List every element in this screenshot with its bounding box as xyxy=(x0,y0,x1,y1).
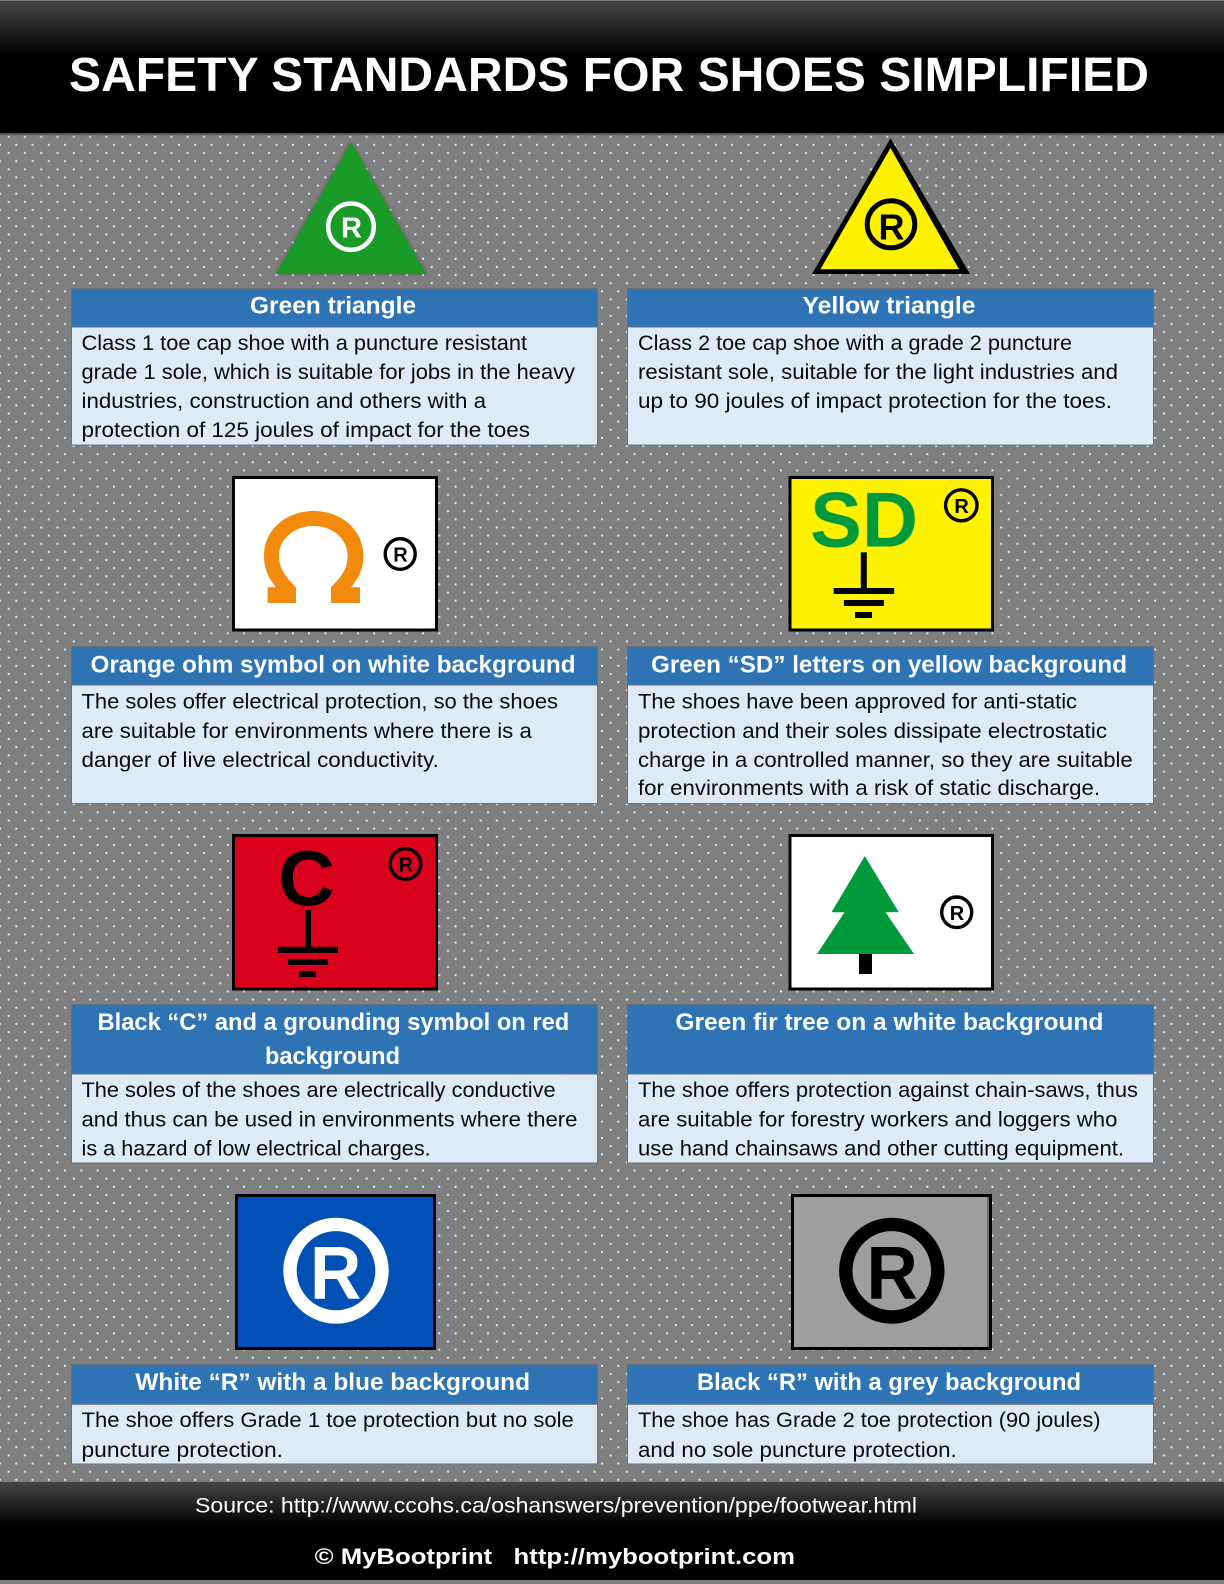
table: green SD xyxy=(628,646,1154,804)
body text: protection of 125 joules of impact for the toes xyxy=(82,418,530,442)
body text: industries, construction and others with a xyxy=(82,389,486,413)
heading: White “R” with a blue background xyxy=(135,1369,530,1396)
heading: Green fir tree on a white background xyxy=(675,1009,1103,1036)
body text: danger of live electrical conductivity. xyxy=(82,748,439,772)
icon: black C with ground on red: R xyxy=(399,855,414,877)
table: white R on blue xyxy=(72,1364,598,1464)
body text: up to 90 joules of impact protection for the toes. xyxy=(638,389,1112,413)
body text xyxy=(82,1078,577,1161)
icon: orange ohm symbol on white: R xyxy=(393,545,408,567)
panel: black C xyxy=(72,834,598,1163)
body text: Class 1 toe cap shoe with a puncture resistant xyxy=(82,331,527,355)
icon: orange ohm symbol on white xyxy=(234,478,436,630)
icon: black R on grey: R xyxy=(866,1230,918,1314)
body text: is a hazard of low electrical charges. xyxy=(82,1137,431,1161)
body text: and no sole puncture protection. xyxy=(638,1438,957,1462)
body text xyxy=(82,689,558,772)
icon: black R on grey xyxy=(792,1196,990,1348)
icon: yellow triangle with R: R xyxy=(878,206,904,247)
icon: yellow triangle with R xyxy=(812,138,970,274)
icon: white R on blue xyxy=(236,1196,434,1348)
heading: background xyxy=(265,1043,400,1070)
panel: green SD xyxy=(628,476,1154,804)
body text: are suitable for forestry workers and loggers who xyxy=(638,1107,1117,1131)
heading xyxy=(98,1009,569,1070)
body text xyxy=(638,1078,1138,1161)
source line: Source: http://www.ccohs.ca/oshanswers/prevention/ppe/footwear.html xyxy=(195,1495,917,1518)
body text: The shoes have been approved for anti-static xyxy=(638,689,1077,713)
body text xyxy=(638,331,1118,413)
heading: Yellow triangle xyxy=(802,292,976,319)
body text: The shoe has Grade 2 toe protection (90 joules) xyxy=(638,1408,1100,1432)
table: green fir tree xyxy=(628,1004,1154,1163)
body text: protection and their soles dissipate electrostatic xyxy=(638,719,1107,743)
heading: Green triangle xyxy=(250,292,416,319)
table: black C xyxy=(72,1004,598,1163)
heading: Green “SD” letters on yellow background xyxy=(651,651,1127,678)
table: yellow triangle xyxy=(628,288,1154,445)
heading: Orange ohm symbol on white background xyxy=(90,651,576,678)
footer band xyxy=(0,1482,1224,1580)
panel: green triangle xyxy=(72,142,598,445)
body text xyxy=(82,331,575,442)
body text: for environments with a risk of static discharge. xyxy=(638,776,1100,800)
icon: green triangle with R: R xyxy=(341,212,362,244)
body text: Class 2 toe cap shoe with a grade 2 puncture xyxy=(638,331,1072,355)
body text: are suitable for environments where there is a xyxy=(82,719,532,743)
body text xyxy=(82,1408,574,1462)
body text: grade 1 sole, which is suitable for jobs in the heavy xyxy=(82,360,575,384)
body text: The soles offer electrical protection, so the shoes xyxy=(82,689,558,713)
heading: Black “C” and a grounding symbol on red xyxy=(98,1009,569,1036)
header band xyxy=(0,0,1224,137)
panel: black R on grey xyxy=(628,1196,1154,1464)
table: orange ohm xyxy=(72,646,598,804)
body text xyxy=(638,1408,1100,1462)
body text: The soles of the shoes are electrically conductive xyxy=(82,1078,556,1102)
icon: green fir tree on white xyxy=(790,836,992,989)
icon: green SD with ground on yellow: R xyxy=(954,496,969,518)
panel: orange ohm xyxy=(72,478,598,804)
body text: and thus can be used in environments where there xyxy=(82,1107,577,1131)
icon: green SD with ground on yellow: SD xyxy=(810,476,918,564)
icon: green fir tree on white: R xyxy=(950,903,965,925)
body text: resistant sole, suitable for the light industries and xyxy=(638,360,1118,384)
table: green triangle xyxy=(72,288,598,445)
table: black R on grey xyxy=(628,1364,1154,1464)
icon: black C with ground on red xyxy=(234,834,436,989)
body text xyxy=(638,689,1133,800)
body text: The shoe offers protection against chain-saws, thus xyxy=(638,1078,1138,1102)
body text: The shoe offers Grade 1 toe protection but no sole xyxy=(82,1408,574,1432)
body text: charge in a controlled manner, so they are suitable xyxy=(638,748,1133,772)
icon: white R on blue: R xyxy=(310,1230,361,1314)
icon: green SD with ground on yellow xyxy=(790,476,992,630)
icon: green triangle with R xyxy=(276,142,426,274)
heading: Black “R” with a grey background xyxy=(697,1369,1081,1396)
panel: white R on blue xyxy=(72,1196,598,1464)
panel: yellow triangle xyxy=(628,138,1154,445)
body text: puncture protection. xyxy=(82,1438,283,1462)
body text: use hand chainsaws and other cutting equipment. xyxy=(638,1137,1124,1161)
copyright line: © MyBootprint http://mybootprint.com xyxy=(315,1544,795,1569)
icon: black C with ground on red: C xyxy=(278,834,335,922)
panel: green fir tree xyxy=(628,836,1154,1163)
title: SAFETY STANDARDS FOR SHOES SIMPLIFIED xyxy=(69,49,1149,102)
